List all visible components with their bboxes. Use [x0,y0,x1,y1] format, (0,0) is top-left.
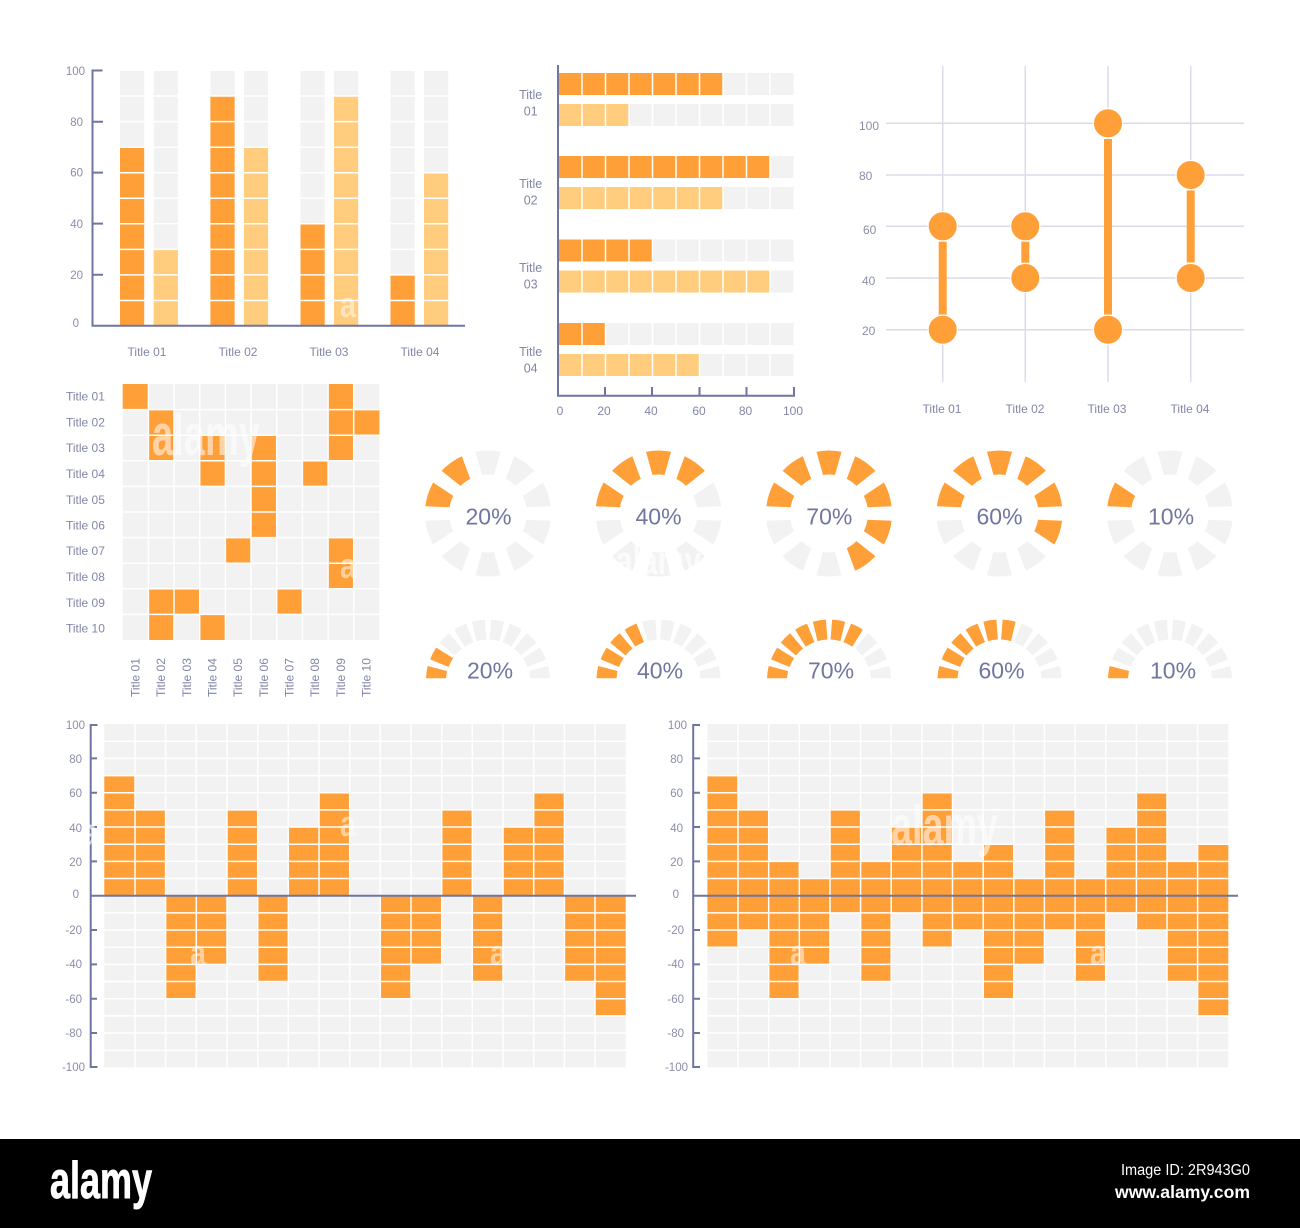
matrix background [123,384,379,640]
y axis labels: -40 [65,959,82,971]
axes [693,725,1238,1067]
row labels: Title [519,177,542,191]
y axis labels: 40 [70,219,83,231]
y axis labels: -40 [667,959,684,971]
y axis labels: 60 [670,788,683,800]
gauge 20% [426,619,550,683]
column labels: Title 04 [206,658,220,697]
range end circles [928,109,1205,344]
panel: range dumbbell chart [859,66,1244,416]
donut 20%: 20% [465,503,512,529]
y axis labels: 40 [69,823,82,835]
watermarks: a [190,932,207,973]
y axis labels: 20 [862,324,876,338]
watermarks: a [80,811,99,855]
row labels: Title 02 [66,416,105,430]
row labels: Title 05 [66,493,105,507]
watermarks: alamy [152,403,260,468]
light orange bars [154,96,448,326]
x axis labels [923,402,1210,416]
x axis labels: 0 [557,404,564,418]
x axis labels: Title 01 [923,402,962,416]
panel: heatmap matrix [66,383,380,697]
gauge 40% [596,619,720,683]
website: www.alamy.com [1114,1182,1250,1202]
y axis labels: 60 [70,168,83,180]
gauge 10% [1108,619,1232,683]
watermarks: alamy [891,794,998,857]
panel: horizontal grouped bar chart [519,65,803,418]
row labels: Title 04 [66,467,105,481]
gauge 20%: 20% [467,657,513,683]
column labels: Title 10 [360,658,374,697]
panel: donut progress gauges [424,450,1234,577]
donut 40% [595,450,722,577]
row labels: Title [519,261,542,275]
y axis labels: -20 [65,925,82,937]
y axis labels: 40 [862,274,876,288]
column labels: Title 06 [257,658,271,697]
gauge 60%: 60% [978,657,1025,683]
x axis labels: 80 [739,404,752,418]
y axis labels: 60 [863,223,877,237]
x axis labels: Title 03 [310,345,349,359]
panel: diverging column chart A [62,720,636,1074]
y axis labels: 100 [668,720,687,732]
y axis labels: -20 [667,925,684,937]
y axis labels: -100 [665,1062,688,1074]
donut 40%: 40% [635,503,682,529]
donut 70%: 70% [806,503,852,529]
row labels: 01 [524,104,538,118]
donut 10% [1106,450,1234,577]
column labels: Title 02 [154,658,168,697]
row labels: Title 09 [66,596,105,610]
y axis labels: 80 [70,117,83,129]
row labels: Title [519,345,542,359]
columns [707,776,1228,1016]
column labels: Title 03 [180,658,194,697]
gauge 60% [938,619,1062,683]
axes [91,725,636,1067]
row labels: 03 [524,278,538,292]
row labels: 04 [524,362,538,376]
watermarks: alamy [616,539,702,583]
y axis labels: 20 [70,270,83,282]
y axis labels: 0 [673,889,679,901]
row labels: Title 07 [66,544,105,558]
footer bar [0,1139,1300,1228]
y axis labels: -100 [62,1062,85,1074]
x axis labels: 100 [783,404,803,418]
y axis labels: -60 [65,994,82,1006]
bar tracks [558,73,794,376]
watermarks: a [790,932,807,973]
donut 20% [424,450,552,577]
y axis labels: 100 [859,119,879,133]
donut 60% [936,450,1063,577]
y axis labels: -80 [667,1028,684,1040]
x axis labels: 40 [644,404,658,418]
x axis labels: Title 01 [128,345,167,359]
row labels: 02 [524,194,538,208]
x axis labels: Title 03 [1088,402,1127,416]
columns [104,776,626,1016]
y axis labels: 100 [66,720,85,732]
y axis labels: 20 [670,857,683,869]
y axis labels: 80 [69,754,82,766]
row labels: Title 01 [66,390,105,404]
watermarks: a [340,545,357,586]
gauge 70%: 70% [808,657,854,683]
light orange bars [558,104,770,376]
y axis labels: 80 [670,754,683,766]
y axis labels [66,66,85,330]
y axis labels: 60 [69,788,82,800]
y axis labels [62,720,85,1074]
row labels: Title 10 [66,622,105,636]
watermarks: a [340,803,357,844]
column labels: Title 01 [128,658,142,697]
donut 70% [765,450,893,577]
y axis labels [665,720,688,1074]
y axis labels: 0 [73,318,79,330]
row labels [519,88,542,376]
column labels [128,658,374,697]
bar tracks [120,71,448,326]
gauge 40%: 40% [637,657,683,683]
y axis labels [859,119,879,338]
row labels: Title [519,88,542,102]
x axis labels [128,345,440,359]
column labels: Title 08 [308,658,322,697]
axes [92,70,465,326]
dark orange bars [120,96,415,326]
range bars [939,139,1195,315]
row labels: Title 03 [66,441,105,455]
y axis labels: -80 [65,1028,82,1040]
column labels: Title 05 [231,658,245,697]
axes [558,65,794,397]
donut 10%: 10% [1148,503,1194,529]
gauge 10%: 10% [1150,657,1196,683]
footer logo: alamy [50,1152,152,1210]
column labels: Title 07 [282,658,296,697]
x axis labels: 60 [692,404,706,418]
x axis labels [557,404,803,418]
y axis labels: 0 [73,889,79,901]
row labels [66,390,105,636]
y axis labels: 40 [670,823,683,835]
y axis labels: 80 [859,169,873,183]
x axis labels: Title 04 [401,345,440,359]
watermarks: a [340,284,357,325]
x axis labels: Title 02 [1006,402,1045,416]
x axis labels: Title 02 [219,345,258,359]
column labels: Title 09 [334,658,348,697]
y axis labels: 20 [69,857,82,869]
row labels: Title 08 [66,570,105,584]
dark orange bars [558,73,770,345]
y axis labels: 100 [66,66,85,78]
y axis labels: -60 [667,994,684,1006]
watermarks: a [1090,932,1107,973]
donut 60%: 60% [976,503,1023,529]
x axis labels: Title 04 [1171,402,1210,416]
panel: semicircle progress gauges [426,619,1232,683]
filled cells [123,384,379,640]
panel: vertical grouped bar chart [66,66,465,359]
x axis labels: 20 [597,404,611,418]
watermarks: a [490,932,507,973]
row labels: Title 06 [66,518,105,532]
gauge 70% [767,619,891,683]
image id: Image ID: 2R943G0 [1121,1162,1250,1179]
watermarks [80,284,1107,973]
panel: diverging column chart B [665,720,1238,1074]
